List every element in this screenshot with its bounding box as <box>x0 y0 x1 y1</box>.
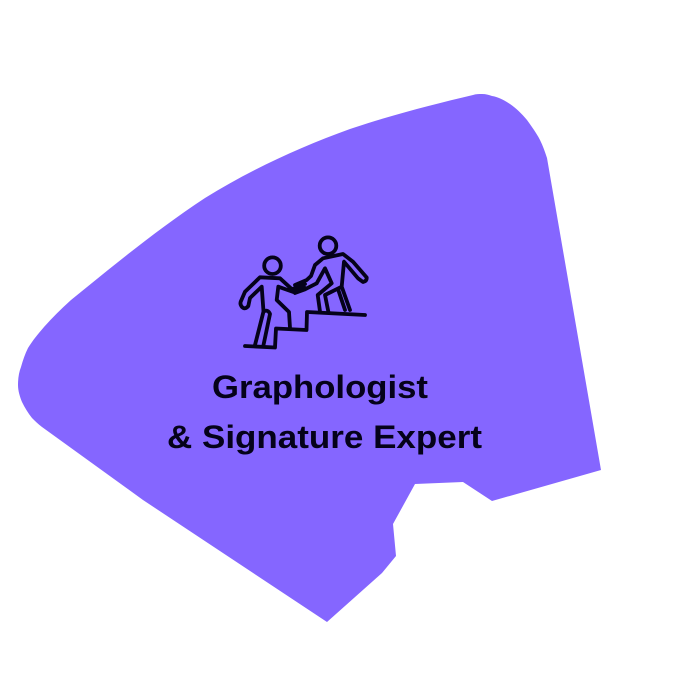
icon: upper person body <box>295 254 367 312</box>
purple blob background panel <box>18 94 601 622</box>
icon: upper person head <box>320 237 336 254</box>
title line 1: Graphologist <box>212 369 428 405</box>
icon: stairs <box>245 312 365 348</box>
title line 2: & Signature Expert <box>167 419 482 455</box>
icon: lower person body <box>240 277 305 345</box>
icon: two people climbing stairs, one helping the other <box>240 237 367 348</box>
title <box>167 369 482 455</box>
icon: lower person head <box>264 257 281 274</box>
